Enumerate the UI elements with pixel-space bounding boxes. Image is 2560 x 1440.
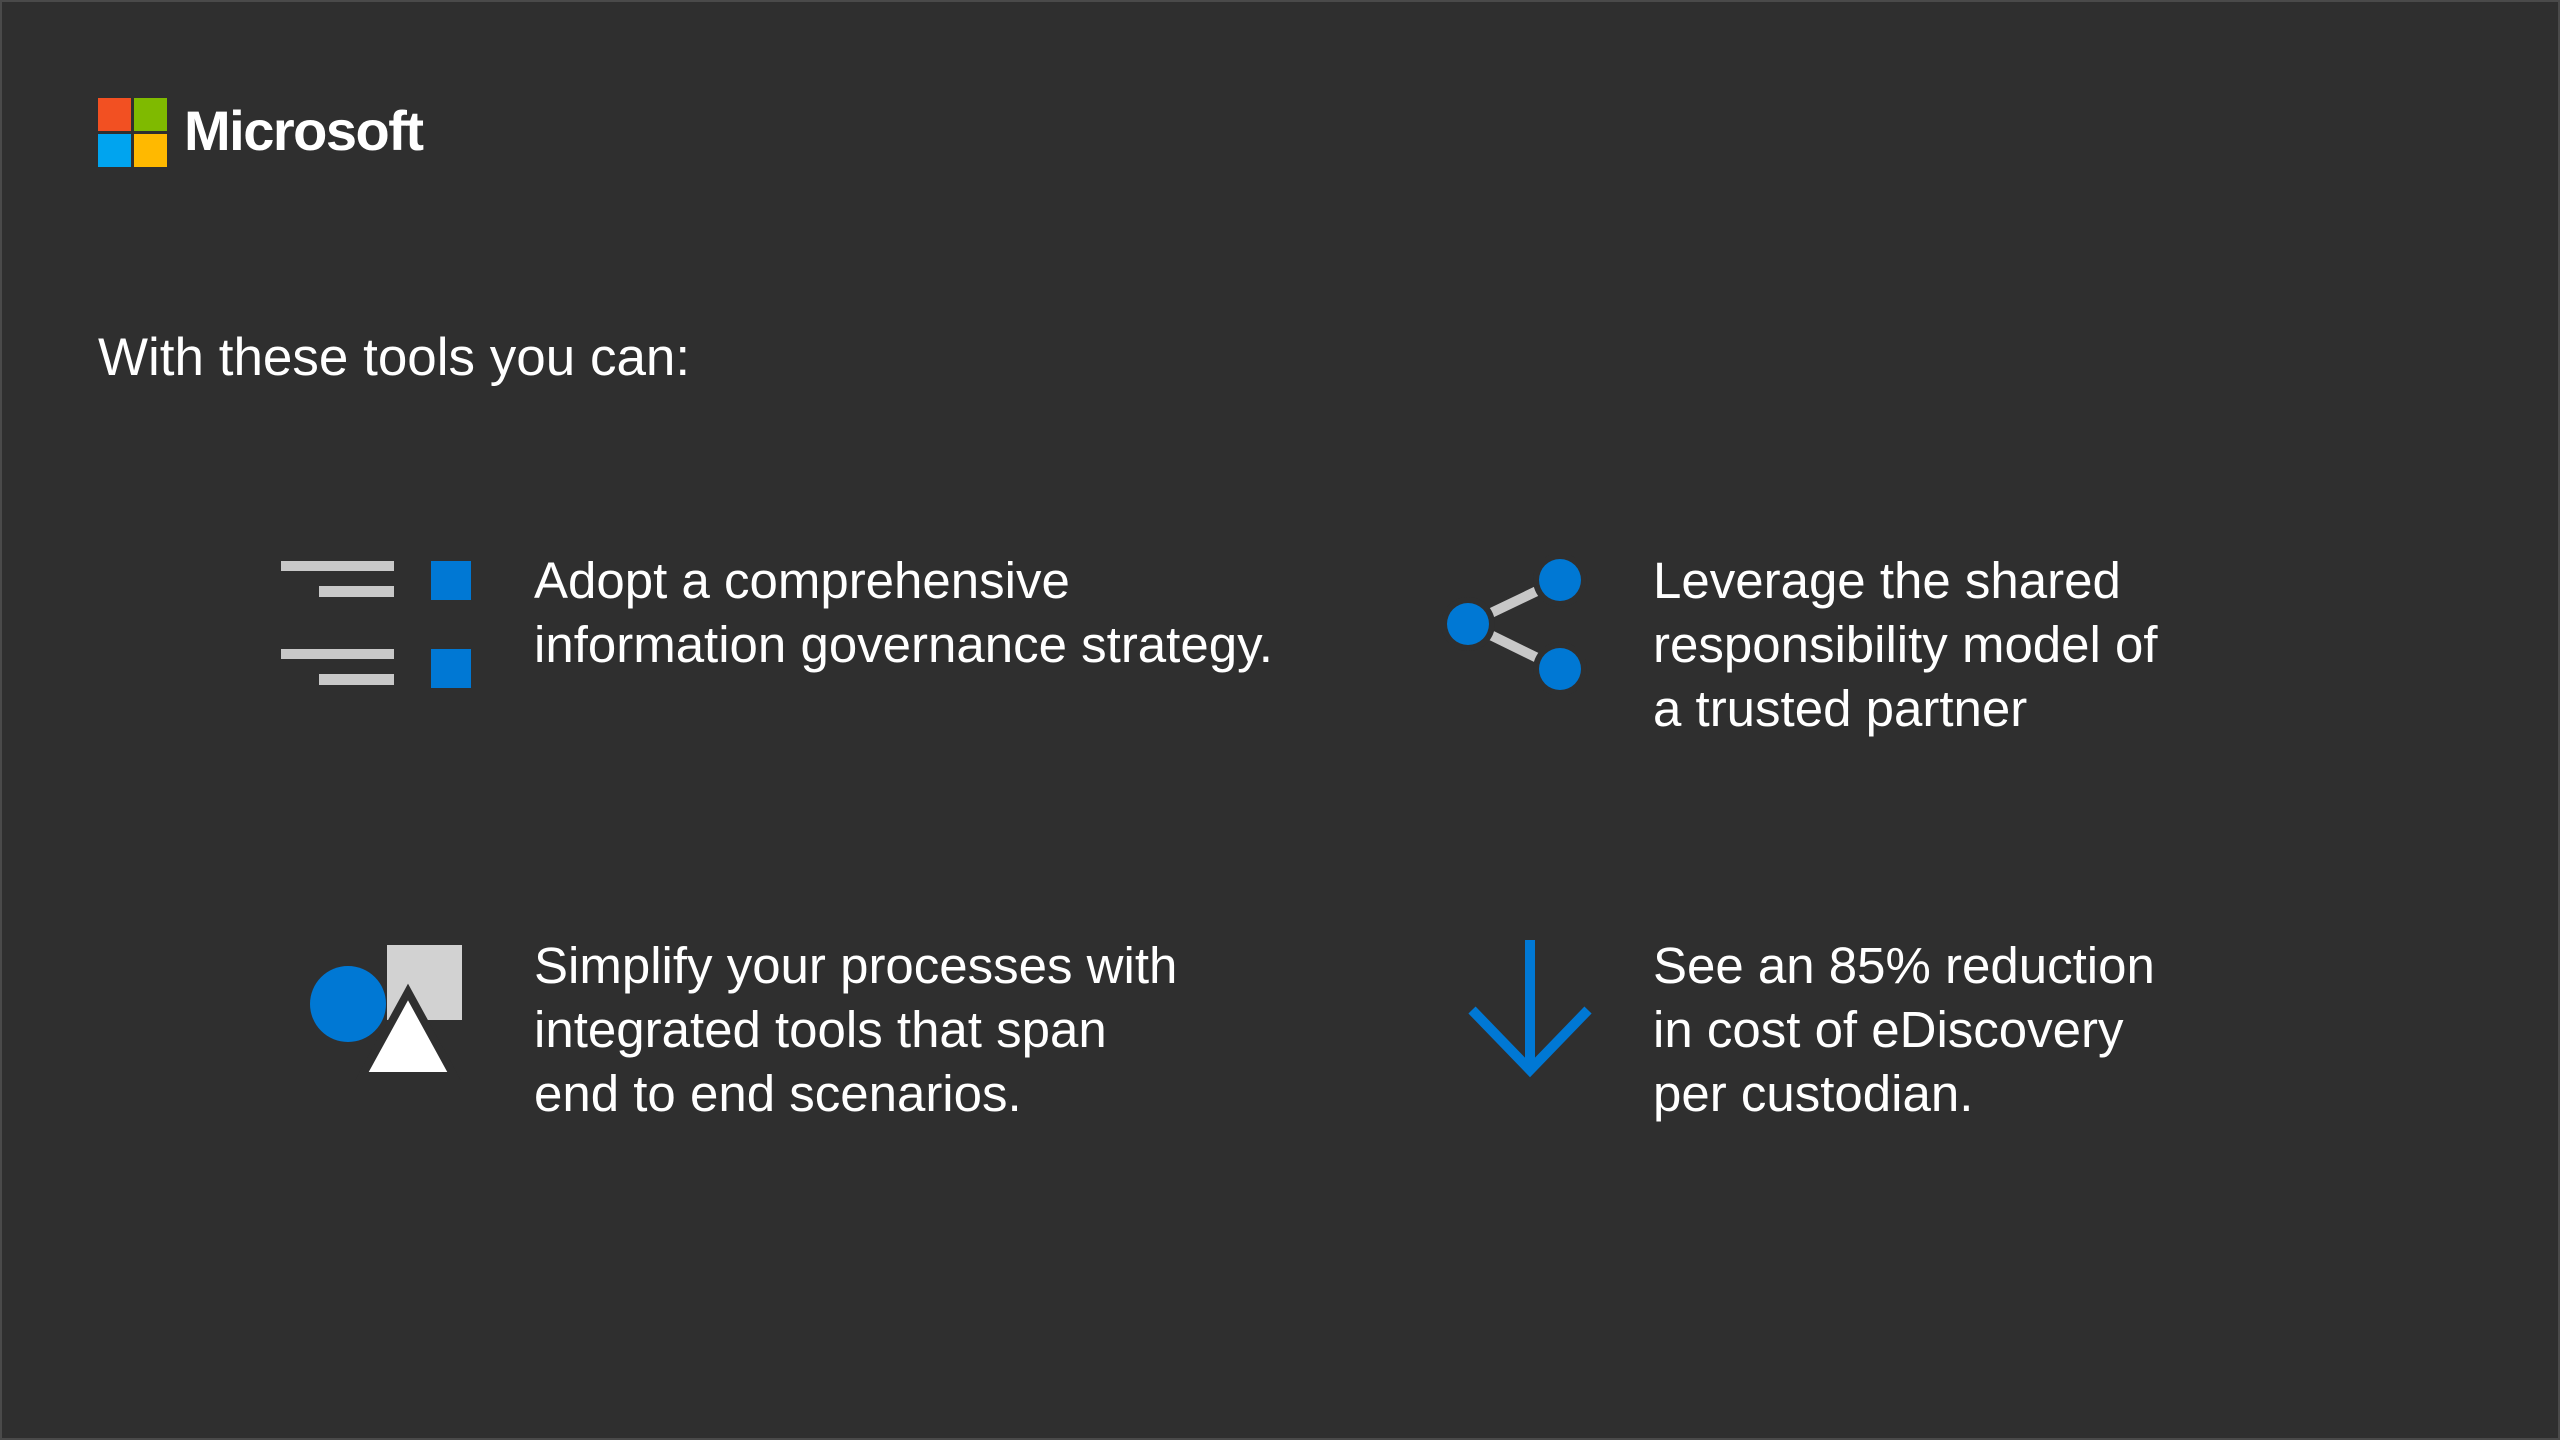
- logo wordmark: Microsoft: [184, 99, 422, 162]
- panel: governance: [281, 552, 1273, 688]
- logo: Microsoft: [98, 98, 424, 167]
- text: simplify: [534, 937, 1177, 1122]
- text: simplify: Simplify your processes with: [534, 937, 1177, 994]
- icon: share: [1447, 559, 1581, 690]
- text: simplify: integrated tools that span: [534, 1001, 1107, 1058]
- panel: shared responsibility: [1447, 552, 2158, 737]
- text: cost reduction: [1653, 937, 2155, 1122]
- text: governance: Adopt a comprehensive: [534, 552, 1070, 609]
- text: cost reduction: per custodian.: [1653, 1065, 1973, 1122]
- icon: four-color squares: [98, 98, 167, 167]
- text: simplify: end to end scenarios.: [534, 1065, 1022, 1122]
- panel: simplify: [310, 937, 1177, 1122]
- text: governance: information governance strategy.: [534, 616, 1273, 673]
- text: shared responsibility: a trusted partner: [1653, 680, 2027, 737]
- text: cost reduction: See an 85% reduction: [1653, 937, 2155, 994]
- text: shared responsibility: [1653, 552, 2158, 737]
- heading: With these tools you can:: [98, 328, 690, 387]
- icon: shapes: [310, 945, 462, 1072]
- panel: cost reduction: [1468, 937, 2155, 1122]
- text: shared responsibility: Leverage the shared: [1653, 552, 2121, 609]
- text: shared responsibility: responsibility model of: [1653, 616, 2158, 673]
- text: governance: [534, 552, 1273, 673]
- icon: list with squares: [281, 561, 471, 688]
- text: cost reduction: in cost of eDiscovery: [1653, 1001, 2124, 1058]
- icon: down arrow: [1468, 940, 1592, 1078]
